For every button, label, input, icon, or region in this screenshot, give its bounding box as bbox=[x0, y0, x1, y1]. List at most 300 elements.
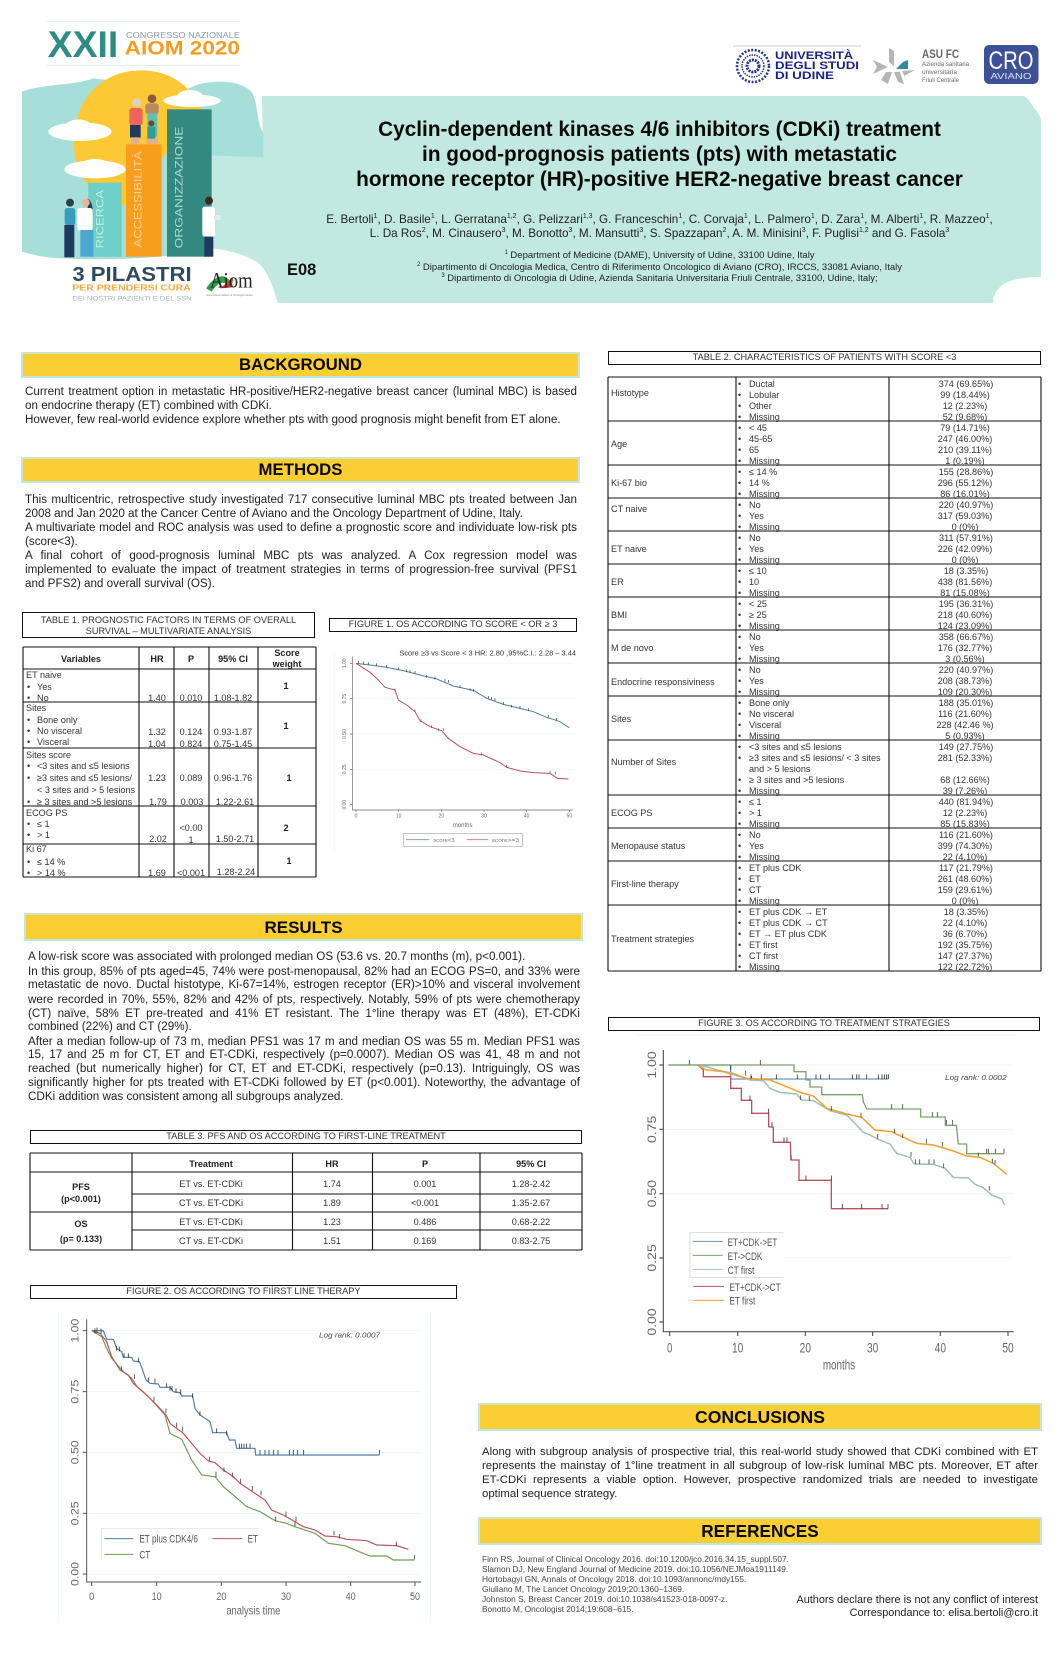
text: conclusions bbox=[482, 1446, 1038, 1500]
table 3: PFS and OS by first-line treatment: ET vs. ET-CDKi bbox=[179, 1179, 243, 1189]
table 2: patient characteristics: ≥ 3 sites and >5 lesions bbox=[749, 775, 845, 785]
table 2: patient characteristics: M de novo bbox=[611, 643, 653, 653]
table 2: patient characteristics: Number of Sites bbox=[611, 757, 677, 767]
table 1: prognostic factors: < 3 sites and > 5 lesions bbox=[37, 785, 136, 795]
legend: ET+CDK->CT bbox=[729, 1282, 781, 1294]
university name bbox=[775, 49, 859, 82]
legend: score>=3 bbox=[492, 838, 519, 844]
table 2: patient characteristics: 10 bbox=[749, 577, 759, 587]
table 2: patient characteristics: 68 (12.66%) bbox=[940, 775, 990, 785]
table 2: patient characteristics: • bbox=[738, 621, 741, 631]
table 1: prognostic factors: 1.32 bbox=[148, 727, 166, 737]
text: results: combined (22%) and CT (29%). bbox=[28, 1020, 192, 1033]
table 1: prognostic factors: <3 sites and ≤5 lesions bbox=[37, 761, 130, 771]
text: results: (CT) naïve, 58% ET pre-treated and 41% ET resistant. The 1°line therapy was ET (48%), ET-CDKi bbox=[28, 1007, 580, 1020]
table 2: patient characteristics: 116 (21.60%) bbox=[938, 709, 992, 719]
table 2: patient characteristics: • bbox=[738, 445, 741, 455]
table 2: patient characteristics: • bbox=[738, 610, 741, 620]
table 2 caption: TABLE 2. CHARACTERISTICS OF PATIENTS WITH SCORE <3 bbox=[693, 352, 956, 362]
table 1: prognostic factors bbox=[22, 646, 317, 878]
table 2: patient characteristics: Missing bbox=[749, 489, 780, 499]
table 1: prognostic factors: 1 bbox=[286, 773, 292, 783]
text: methods: (score<3). bbox=[25, 535, 78, 548]
curve: ET first bbox=[698, 1066, 1007, 1174]
axes bbox=[83, 1319, 421, 1586]
table 1: prognostic factors: ≤ 14 % bbox=[37, 857, 65, 867]
table 3: PFS and OS by first-line treatment: <0.001 bbox=[411, 1198, 439, 1208]
table 2: patient characteristics: Yes bbox=[749, 643, 764, 653]
authors: E. Bertoli1, D. Basile1, L. Gerratana1,2, G. Pelizzari1,3, G. Franceschin1, C. Corvaja1, L. Palmero1, D. Zara1, M. Alberti1, R. Mazzeo1, bbox=[326, 213, 993, 226]
table 2: patient characteristics: 0 (0%) bbox=[952, 555, 978, 565]
sun bbox=[74, 70, 202, 207]
table 2: patient characteristics: • bbox=[738, 412, 741, 422]
table 2: patient characteristics: 22 (4.10%) bbox=[943, 918, 987, 928]
axis labels: 0 bbox=[667, 1340, 672, 1356]
ASU FC name: universitaria bbox=[922, 70, 958, 76]
figure 1 caption: FIGURE 1. OS ACCORDING TO SCORE < OR ≥ 3 bbox=[349, 619, 557, 629]
table 1: prognostic factors: Ki 67 bbox=[26, 844, 47, 854]
legend: ET bbox=[248, 1534, 258, 1546]
table 2: patient characteristics: 22 (4.10%) bbox=[943, 852, 987, 862]
logo: ASU FC bbox=[873, 47, 970, 84]
axis labels: 0.00 bbox=[69, 1562, 81, 1586]
table 2: patient characteristics: 39 (7.26%) bbox=[943, 786, 987, 796]
axis labels: 0.50 bbox=[342, 729, 348, 739]
table 2: patient characteristics: Missing bbox=[749, 819, 780, 829]
table 1: prognostic factors: <0.001 bbox=[177, 868, 205, 878]
table 1: prognostic factors: • bbox=[27, 868, 30, 878]
table 2: patient characteristics: < 45 bbox=[749, 423, 767, 433]
axis labels: 40 bbox=[524, 814, 530, 820]
table 1 caption: SURVIVAL – MULTIVARIATE ANALYSIS bbox=[86, 626, 251, 636]
table 1: prognostic factors: 0.124 bbox=[180, 727, 202, 737]
table 2: patient characteristics: • bbox=[738, 786, 741, 796]
table 2: patient characteristics: 65 bbox=[749, 445, 759, 455]
title bbox=[356, 118, 963, 191]
table 2: patient characteristics: 3 (0.56%) bbox=[945, 654, 985, 664]
table 1: prognostic factors: • bbox=[27, 682, 30, 692]
legend bbox=[102, 1528, 259, 1562]
table 2: patient characteristics: Age bbox=[611, 439, 627, 449]
axes bbox=[659, 1050, 1014, 1336]
axis labels: 40 bbox=[346, 1591, 356, 1603]
table 1: prognostic factors: 1.08-1.82 bbox=[214, 693, 252, 703]
table 2: patient characteristics: • bbox=[738, 907, 741, 917]
table 2: patient characteristics: No bbox=[749, 830, 761, 840]
table 2: patient characteristics: 440 (81.94%) bbox=[939, 797, 993, 807]
table 2: patient characteristics: 155 (28.86%) bbox=[939, 467, 993, 477]
text: background bbox=[25, 385, 577, 426]
table 1: prognostic factors: 1.23 bbox=[148, 773, 166, 783]
table 2: patient characteristics: • bbox=[738, 742, 741, 752]
table 2: patient characteristics: 81 (15.08%) bbox=[940, 588, 990, 598]
legend: CT bbox=[139, 1550, 151, 1562]
table 2: patient characteristics: 228 (42.46 %) bbox=[936, 720, 994, 730]
table 1 caption bbox=[22, 612, 315, 638]
table 2: patient characteristics: Treatment strategies bbox=[611, 934, 695, 944]
table 3: PFS and OS by first-line treatment: CT vs. ET-CDKi bbox=[179, 1198, 243, 1208]
table 2: patient characteristics: Missing bbox=[749, 654, 780, 664]
table 2: patient characteristics: <3 sites and ≤5 lesions bbox=[749, 742, 842, 752]
axis labels: 0.25 bbox=[69, 1501, 81, 1525]
title: in good-prognosis patients (pts) with metastatic bbox=[422, 143, 897, 166]
axis labels: 50 bbox=[567, 814, 572, 820]
table 2: patient characteristics: Missing bbox=[749, 588, 780, 598]
logo: CRO Aviano: AVIANO bbox=[990, 71, 1032, 81]
table 2: patient characteristics: • bbox=[738, 775, 741, 785]
table 1: prognostic factors: 0.010 bbox=[180, 693, 202, 703]
axis labels bbox=[69, 1319, 420, 1618]
axis labels: 0.00 bbox=[645, 1308, 659, 1336]
pillar: organizzazione bbox=[167, 109, 212, 257]
figure 3 caption: FIGURE 3. OS ACCORDING TO TREATMENT STRATEGIES bbox=[698, 1018, 950, 1028]
ASU FC name: ASU FC bbox=[922, 47, 959, 61]
table 2: patient characteristics: Yes bbox=[749, 511, 764, 521]
table 3: PFS and OS by first-line treatment: Treatment bbox=[189, 1159, 233, 1169]
table 2: patient characteristics: Yes bbox=[749, 841, 764, 851]
ASU FC name: Friuli Centrale bbox=[922, 78, 960, 84]
table 2: patient characteristics: • bbox=[738, 698, 741, 708]
table 1: prognostic factors: • bbox=[27, 773, 30, 783]
axis labels: 0 bbox=[355, 814, 358, 820]
disclosure and correspondence: Authors declare there is not any conflict of interest bbox=[796, 1594, 1038, 1606]
table 3: PFS and OS by first-line treatment: 1.89 bbox=[323, 1198, 341, 1208]
table 1: prognostic factors: • bbox=[27, 715, 30, 725]
table 1: prognostic factors: 1.79 bbox=[149, 797, 167, 807]
table 1: prognostic factors: Sites bbox=[26, 703, 47, 713]
text: results: After a median follow-up of 73 m, median PFS1 was 17 m and median OS was 55 m. Median PFS1 was bbox=[28, 1035, 580, 1048]
icon: AIOM logo: Associazione Italiana di Oncologia Medica bbox=[206, 293, 253, 297]
figure 2 caption bbox=[30, 1285, 457, 1299]
axis labels: 30 bbox=[481, 814, 487, 820]
congress title bbox=[47, 22, 240, 65]
table 2: patient characteristics: 220 (40.97%) bbox=[939, 500, 993, 510]
table 3: PFS and OS by first-line treatment: CT vs. ET-CDKi bbox=[179, 1236, 243, 1246]
table 2: patient characteristics: • bbox=[738, 962, 741, 972]
table 1: prognostic factors: 1.69 bbox=[148, 868, 166, 878]
table 1: prognostic factors: No bbox=[37, 693, 49, 703]
table 2: patient characteristics: • bbox=[738, 599, 741, 609]
axis labels: 1.00 bbox=[342, 658, 348, 668]
table 2: patient characteristics: Ki-67 bio bbox=[611, 478, 647, 488]
table 2: patient characteristics: 52 (9.68%) bbox=[943, 412, 987, 422]
congress title: AIOM 2020 bbox=[125, 39, 240, 60]
table 2: patient characteristics: • bbox=[738, 632, 741, 642]
legend: ET plus CDK4/6 bbox=[139, 1534, 198, 1546]
legend: ET first bbox=[729, 1296, 756, 1308]
table 1 caption: TABLE 1. PROGNOSTIC FACTORS IN TERMS OF OVERALL bbox=[41, 614, 296, 624]
table 1: prognostic factors: 0.75-1.45 bbox=[214, 739, 252, 749]
axis labels: 30 bbox=[867, 1340, 878, 1356]
table 2: patient characteristics: 45-65 bbox=[749, 434, 772, 444]
table 2: patient characteristics: • bbox=[738, 456, 741, 466]
table 2: patient characteristics: • bbox=[738, 533, 741, 543]
table 2: patient characteristics: ET plus CDK → ET bbox=[749, 907, 828, 917]
axis labels: 50 bbox=[1002, 1340, 1014, 1356]
table 2: patient characteristics: 176 (32.77%) bbox=[938, 643, 992, 653]
table 2: patient characteristics: 0 (0%) bbox=[952, 896, 978, 906]
table 2: patient characteristics: • bbox=[738, 819, 741, 829]
table 1: prognostic factors: 1.22-2.61 bbox=[216, 797, 254, 807]
table 2: patient characteristics: ≤ 14 % bbox=[749, 467, 777, 477]
text: methods: A multivariate model and ROC analysis was used to define a prognostic score and individuate low-risk pts bbox=[25, 521, 577, 534]
table 2: patient characteristics: 116 (21.60%) bbox=[939, 830, 993, 840]
text: methods: implemented to evaluate the impact of treatment strategies in terms of progression-free survival (PFS1 bbox=[25, 563, 577, 576]
icon: university seal bbox=[737, 50, 769, 82]
table 2: patient characteristics: Sites bbox=[611, 714, 632, 724]
table 2: patient characteristics: Menopause status bbox=[611, 841, 686, 851]
congress title: XXII bbox=[48, 23, 118, 65]
background cloud shape bbox=[22, 78, 263, 259]
table 3: PFS and OS by first-line treatment: 0.169 bbox=[414, 1236, 436, 1246]
table 2: patient characteristics: • bbox=[738, 390, 741, 400]
table 2: patient characteristics: 86 (16.01%) bbox=[940, 489, 990, 499]
pillar: organizzazione: ORGANIZZAZIONE bbox=[173, 126, 185, 248]
text: references: Bonotto M, Oncologist 2014;19:608–615. bbox=[482, 1604, 633, 1614]
table 2: patient characteristics: Yes bbox=[749, 676, 764, 686]
text: background: on endocrine therapy (ET) combined with CDKi. bbox=[25, 399, 272, 412]
table 2: patient characteristics: > 1 bbox=[749, 808, 762, 818]
table 1: prognostic factors: Bone only bbox=[37, 715, 78, 725]
table 2: patient characteristics: • bbox=[738, 841, 741, 851]
affiliations: 3 Dipartimento di Oncologia di Udine, Azienda Sanitaria Universitaria Friuli Centrale, 33100, Udine, Italy; bbox=[441, 273, 878, 284]
table 2: patient characteristics: Missing bbox=[749, 456, 780, 466]
table 2: patient characteristics: 210 (39.11%) bbox=[938, 445, 992, 455]
table 1: prognostic factors: 0.003 bbox=[181, 797, 203, 807]
axis labels: 0.50 bbox=[645, 1180, 659, 1207]
table 2: patient characteristics: Visceral bbox=[749, 720, 781, 730]
table 2: patient characteristics: 1 (0.19%) bbox=[945, 456, 985, 466]
table 2: patient characteristics: 188 (35.01%) bbox=[939, 698, 993, 708]
table 3: PFS and OS by first-line treatment: OS bbox=[74, 1219, 88, 1229]
figure 1: OS by score bbox=[334, 648, 576, 852]
table 2: patient characteristics: No bbox=[749, 665, 761, 675]
table 2: patient characteristics: ET plus CDK bbox=[749, 863, 801, 873]
heading: background: BACKGROUND bbox=[239, 355, 362, 374]
heading: results bbox=[24, 913, 583, 941]
table 2: patient characteristics: CT first bbox=[749, 951, 779, 961]
table 1: prognostic factors: ET naive bbox=[26, 670, 62, 680]
table 2: patient characteristics: • bbox=[738, 401, 741, 411]
axis labels: 10 bbox=[396, 814, 402, 820]
text: results: reached (but numerically higher) for CT, ET and ET-CDKi, respectively (p=0.13). Intriguingly, OS was bbox=[28, 1062, 580, 1075]
table 1: prognostic factors: 0.824 bbox=[180, 739, 202, 749]
text: results: CDKi addition was consistent among all subgroups analyzed. bbox=[28, 1090, 344, 1103]
table 3: PFS and OS by first-line treatment: 0.68-2.22 bbox=[512, 1217, 550, 1227]
table 1: prognostic factors: 1.40 bbox=[148, 693, 166, 703]
curve: ET bbox=[92, 1331, 408, 1549]
pillar: accessibilita: ACCESSIBILITÀ bbox=[131, 151, 144, 247]
table 2: patient characteristics: • bbox=[738, 885, 741, 895]
legend bbox=[403, 833, 522, 847]
table 2: patient characteristics: • bbox=[738, 709, 741, 719]
table 2: patient characteristics: 374 (69.65%) bbox=[939, 379, 993, 389]
legend bbox=[690, 1232, 783, 1308]
table 2: patient characteristics: 117 (21.79%) bbox=[939, 863, 993, 873]
table 2: patient characteristics: 226 (42.09%) bbox=[938, 544, 992, 554]
legend: ET+CDK->ET bbox=[728, 1237, 777, 1249]
table 1: prognostic factors: 1.50-2.71 bbox=[216, 834, 254, 844]
table 1: prognostic factors: 0.089 bbox=[180, 773, 202, 783]
text: references bbox=[482, 1554, 789, 1614]
text: results: A low-risk score was associated with prolonged median OS (53.6 vs. 20.7 months (m), p<0.001). bbox=[28, 950, 525, 963]
campaign title: 3 PILASTRI bbox=[72, 264, 192, 286]
table 3: PFS and OS by first-line treatment: 0.486 bbox=[414, 1217, 436, 1227]
text: methods: 2008 and Jan 2020 at the Cancer Centre of Aviano and the Oncology Department of Udine, Italy. bbox=[25, 507, 523, 520]
table 1: prognostic factors: 2.02 bbox=[149, 834, 167, 844]
table 1: prognostic factors: Yes bbox=[37, 682, 52, 692]
table 3: PFS and OS by first-line treatment bbox=[29, 1152, 583, 1250]
table 3: PFS and OS by first-line treatment: HR bbox=[325, 1159, 339, 1169]
table 2: patient characteristics: • bbox=[738, 665, 741, 675]
text: background: Current treatment option in metastatic HR-positive/HER2-negative breast cancer (luminal MBC) is based bbox=[25, 385, 577, 398]
axis labels: analysis time bbox=[226, 1604, 281, 1618]
table 2: patient characteristics: 124 (23.09%) bbox=[938, 621, 992, 631]
text: conclusions: Along with subgroup analysis of prospective trial, this real-world study showed that CDKi combined with ET bbox=[482, 1446, 1038, 1458]
text: results: In this group, 85% of pts aged=45, 74% were post-menopausal, 82% had an ECOG PS=0, and 33% were bbox=[28, 965, 580, 978]
axis labels: 0.75 bbox=[69, 1380, 81, 1404]
text: results bbox=[28, 950, 580, 1103]
table 2: patient characteristics: ≤ 10 bbox=[749, 566, 767, 576]
table 2: patient characteristics: 5 (0.93%) bbox=[945, 731, 985, 741]
axis labels: 0 bbox=[89, 1591, 94, 1603]
text: results: metastatic de novo. Ductal histotype, Ki-67=14%, estrogen receptor (ER)>10% and visceral involvement bbox=[28, 978, 580, 991]
logo: CRO Aviano bbox=[984, 45, 1038, 84]
university name: DI UDINE bbox=[775, 70, 834, 82]
table 2: patient characteristics: Other bbox=[749, 401, 772, 411]
figure 2: OS by first-line therapy bbox=[58, 1310, 431, 1624]
table 1: prognostic factors: • bbox=[27, 726, 30, 736]
table 2: patient characteristics: • bbox=[738, 467, 741, 477]
table 2: patient characteristics: First-line therapy bbox=[611, 879, 679, 889]
table 2: patient characteristics: and > 5 lesions bbox=[749, 764, 811, 774]
axis labels: 20 bbox=[800, 1340, 811, 1356]
table 2: patient characteristics: 147 (27.37%) bbox=[938, 951, 992, 961]
table 1: prognostic factors: P bbox=[188, 654, 194, 664]
axis labels: 0.75 bbox=[645, 1115, 659, 1143]
table 2: patient characteristics: • bbox=[738, 929, 741, 939]
text: methods: This multicentric, retrospective study investigated 717 consecutive luminal MBC pts treated between Jan bbox=[25, 493, 577, 506]
text: references: Johnston S, Breast Cancer 2019. doi:10.1038/s41523-018-0097-z. bbox=[482, 1594, 727, 1604]
title: Cyclin-dependent kinases 4/6 inhibitors (CDKi) treatment bbox=[378, 118, 941, 141]
table 3: PFS and OS by first-line treatment: 1.74 bbox=[323, 1179, 341, 1189]
table 2: patient characteristics: 192 (35.75%) bbox=[938, 940, 992, 950]
table 2: patient characteristics: Missing bbox=[749, 962, 780, 972]
curve: ET+CDK->ET bbox=[668, 1060, 888, 1080]
table 2: patient characteristics: 12 (2.23%) bbox=[943, 808, 987, 818]
heading: references: REFERENCES bbox=[701, 1521, 819, 1541]
table 2: patient characteristics: • bbox=[738, 500, 741, 510]
figure 2 caption: FIGURE 2. OS ACCORDING TO FIİRST LINE THERAPY bbox=[126, 1286, 361, 1296]
table 2: patient characteristics: 149 (27.75%) bbox=[939, 742, 993, 752]
table 2: patient characteristics: 438 (81.56%) bbox=[938, 577, 992, 587]
table 2: patient characteristics: ET first bbox=[749, 940, 778, 950]
axis labels: 1.00 bbox=[69, 1319, 81, 1343]
table 2: patient characteristics: • bbox=[738, 434, 741, 444]
axis labels: 20 bbox=[216, 1591, 226, 1603]
table 2: patient characteristics: • bbox=[738, 852, 741, 862]
legend: CT first bbox=[728, 1265, 755, 1277]
title: hormone receptor (HR)-positive HER2-negative breast cancer bbox=[356, 168, 963, 191]
congress logo and pillars illustration bbox=[22, 21, 264, 302]
disclosure and correspondence bbox=[796, 1594, 1038, 1619]
poster code: E08 bbox=[287, 261, 316, 279]
table 2: patient characteristics: • bbox=[738, 874, 741, 884]
axis labels: 30 bbox=[281, 1591, 291, 1603]
table 2: patient characteristics: • bbox=[738, 863, 741, 873]
table 2: patient characteristics: Missing bbox=[749, 621, 780, 631]
table 2: patient characteristics bbox=[607, 376, 1042, 972]
table 1: prognostic factors: 1 bbox=[283, 721, 289, 731]
text: methods: A final cohort of good-prognosis luminal MBC pts was analyzed. A Cox regression model was bbox=[25, 549, 577, 562]
table 3: PFS and OS by first-line treatment: 1.51 bbox=[323, 1236, 341, 1246]
text: background: However, few real-world evidence explore whether pts with good prognosis might benefit from ET alone. bbox=[25, 413, 561, 426]
ASU FC name: Azienda sanitaria bbox=[922, 62, 970, 68]
table 3: PFS and OS by first-line treatment: 0.83-2.75 bbox=[512, 1236, 550, 1246]
curve: CT first bbox=[700, 1066, 1005, 1205]
table 2: patient characteristics: 399 (74.30%) bbox=[938, 841, 992, 851]
table 2: patient characteristics: 311 (57.91%) bbox=[939, 533, 993, 543]
table 2: patient characteristics: Missing bbox=[749, 786, 780, 796]
table 2: patient characteristics: Ductal bbox=[749, 379, 775, 389]
table 2: patient characteristics: • bbox=[738, 676, 741, 686]
table 2: patient characteristics: No bbox=[749, 533, 761, 543]
table 2: patient characteristics: ECOG PS bbox=[611, 808, 652, 818]
ASU FC name bbox=[922, 47, 970, 84]
heading: background bbox=[21, 352, 580, 378]
affiliations: 1 Department of Medicine (DAME), University of Udine, 33100 Udine, Italy bbox=[504, 250, 815, 261]
text: results: significantly higher for pts treated with ET-CDKi followed by ET (p<0.001). Noteworthy, the advantage of bbox=[28, 1076, 580, 1089]
text: conclusions: optimal sequence strategy. bbox=[482, 1488, 617, 1500]
table 2: patient characteristics: 247 (46.00%) bbox=[938, 434, 992, 444]
table 1: prognostic factors: 95% CI bbox=[218, 654, 248, 664]
axis labels: 10 bbox=[732, 1340, 743, 1356]
table 1: prognostic factors: 0.96-1.76 bbox=[214, 773, 252, 783]
table 1: prognostic factors: 0.93-1.87 bbox=[214, 727, 252, 737]
table 2: patient characteristics: • bbox=[738, 522, 741, 532]
table 2: patient characteristics: 109 (20.30%) bbox=[938, 687, 992, 697]
campaign title: PER PRENDERSI CURA bbox=[72, 283, 191, 293]
table 2: patient characteristics: No bbox=[749, 500, 761, 510]
table 1: prognostic factors: 1 bbox=[283, 681, 289, 691]
axis labels: 20 bbox=[439, 814, 444, 820]
people: doctor with clipboard bbox=[202, 197, 221, 257]
table 2: patient characteristics: • bbox=[738, 720, 741, 730]
table 2: patient characteristics: • bbox=[738, 555, 741, 565]
table 2: patient characteristics: 0 (0%) bbox=[952, 522, 978, 532]
table 1: prognostic factors: <0.00 bbox=[179, 823, 203, 833]
table 2: patient characteristics: ≥3 sites and ≤5 lesions/ < 3 sites bbox=[749, 753, 881, 763]
axis labels: 50 bbox=[410, 1591, 420, 1603]
authors bbox=[326, 213, 993, 240]
table 2: patient characteristics: Yes bbox=[749, 544, 764, 554]
heading: methods bbox=[21, 457, 580, 483]
chart annotation: Score ≥3 vs Score < 3 HR: 2.80 ,95%C.I.: 2.28 – 3.44 bbox=[399, 648, 576, 657]
campaign title bbox=[72, 264, 192, 302]
table 2: patient characteristics: • bbox=[738, 577, 741, 587]
table 3: PFS and OS by first-line treatment: (p= 0.133) bbox=[60, 1234, 102, 1244]
table 2: patient characteristics: • bbox=[738, 566, 741, 576]
table 2: patient characteristics: • bbox=[738, 797, 741, 807]
icon: star of arrows bbox=[873, 48, 915, 84]
text: methods: and PFS2) and overall survival (OS). bbox=[25, 577, 215, 590]
affiliations bbox=[417, 250, 902, 284]
table 3: PFS and OS by first-line treatment: PFS bbox=[72, 1182, 90, 1192]
table 2: patient characteristics: • bbox=[738, 687, 741, 697]
table 2 caption bbox=[608, 351, 1041, 365]
table 2: patient characteristics: ET plus CDK → CT bbox=[749, 918, 828, 928]
pillar: accessibilita bbox=[126, 144, 162, 257]
